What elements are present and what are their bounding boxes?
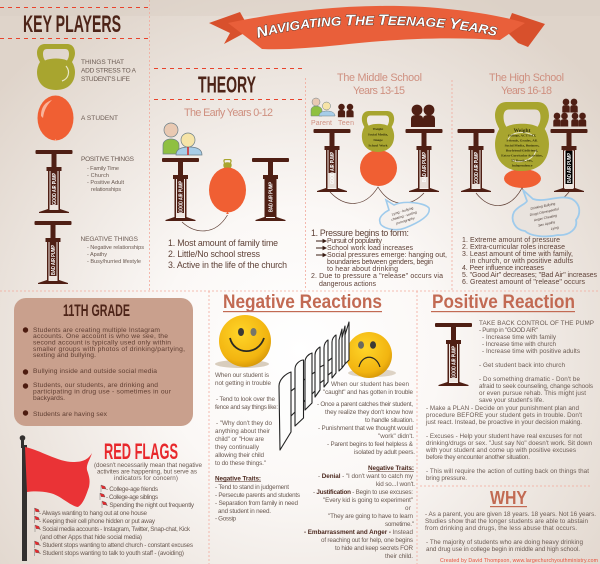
heading: key players: KEY PLAYERS: [23, 11, 121, 38]
icon: big kettlebell: Weight: [514, 128, 531, 134]
icon: bad pump: [406, 129, 442, 192]
banner title: NAVIGATING THE TEENAGE YEARS: [257, 14, 498, 38]
icon: flag: [20, 435, 92, 561]
text: stress: THINGS THAT: [81, 59, 124, 66]
credit: Created by David Thompson, www.largechurchyouthministry.com: [440, 558, 598, 564]
text: plan and excuses: [425, 405, 592, 482]
list: high school: 2. Extra-curricular roles increase: [462, 244, 565, 251]
callout: release bubble: [380, 200, 429, 230]
text: plan and excuses: - This will require the action of cutting back on things that: [426, 468, 589, 475]
labels: parent and teen: Teen: [338, 120, 354, 127]
icon: big kettlebell: Social Media, Business,: [505, 144, 540, 148]
list: red flags: - Social media accounts - Instagram, Twitter, Snap-chat, Kick: [39, 526, 191, 533]
icon: teen: [338, 104, 354, 117]
icon: bad air pump: BAD AIR PUMP: [51, 245, 57, 275]
text: plan and excuses: bring pressure.: [426, 475, 467, 482]
callout: release bubble: Drugs Disrespectful: [529, 207, 559, 217]
text: negative traits right: sometime.": [385, 521, 414, 528]
icon: good air pump: GOOD AIR PUMP: [52, 173, 58, 205]
text: when caught: "work" didn't.: [378, 433, 414, 440]
text: take back control: or even pursue rehab. This might just: [479, 390, 586, 397]
text: positive things: - Church: [87, 173, 109, 179]
text: when caught: - Parent begins to feel helpless &: [327, 441, 414, 448]
text: when caught: "caught" and has gotten in trouble: [323, 389, 413, 396]
text: negative things: - Apathy: [87, 252, 107, 258]
text: when caught: - Punishment that we thought would: [318, 425, 413, 432]
heading: middle school: The Middle School: [337, 72, 422, 84]
list: high school: 6. Greatest amount of "release" occurs: [462, 279, 586, 286]
list: middle school: Social pressures emerge: hanging out,: [327, 252, 447, 259]
icon: fence: [279, 322, 349, 450]
panel: red flags: [20, 435, 202, 561]
text: positive things: relationships: [91, 187, 121, 193]
callout: release bubble: Lying: [550, 225, 559, 231]
text: when caught: they realize they don't know how: [325, 409, 413, 416]
text: 11th grade observations: participating in drug use - sometimes in our: [33, 388, 172, 396]
icon: balloon: [360, 150, 397, 186]
icon: big kettlebell: Extra-Curricular Activities,: [501, 154, 543, 158]
text: when not in trouble: child" or "How are: [215, 436, 264, 443]
text: why: from drinking and drugs, the less abuse that occurs.: [425, 525, 577, 532]
text: plan and excuses: before they encounter another situation.: [426, 454, 530, 461]
text: negative traits right: Negative Traits:: [368, 465, 414, 472]
list: middle school: to hear about drinking: [327, 266, 398, 273]
list: middle school: Pursuit of popularity: [327, 238, 382, 245]
heading: middle school: [337, 72, 422, 97]
text: negative traits left: [215, 476, 300, 522]
text: take back control: save your student's life.: [479, 397, 544, 404]
text: negative traits right: "They are going to have to learn: [328, 513, 413, 520]
heading: high school: The High School: [489, 72, 564, 84]
text: take back control: [479, 320, 594, 404]
list: early years: 3. Active in the life of the church: [168, 260, 287, 270]
icon: good air pump: GOOD AIR PUMP: [451, 346, 457, 378]
text: when caught: When our student has been: [331, 381, 409, 388]
icon: good pump: [458, 129, 494, 192]
text: a student: A STUDENT: [81, 115, 118, 122]
text: plan and excuses: with your student and come up with positive excuses: [425, 447, 576, 454]
text: negative traits left: - Persecute parents and students: [215, 492, 300, 499]
list: high school: [462, 237, 598, 286]
text: positive things: - Family Time: [87, 166, 119, 172]
heading: why: WHY: [490, 488, 527, 508]
bullets: [23, 327, 28, 416]
callout: release bubble: Sex Apathy: [538, 220, 556, 228]
list: middle school: School work load increases: [327, 245, 414, 252]
heading: 11th grade: 11TH GRADE: [63, 301, 130, 320]
text: negative traits right: their child.: [385, 553, 413, 560]
icon: big kettlebell: Friends, Grades, AP,: [507, 138, 538, 142]
text: negative traits right: - Embarrassment and Anger - Instead: [304, 529, 413, 536]
text: 11th grade observations: backyards.: [33, 395, 65, 402]
text: take back control: - Get student back into church: [479, 362, 565, 369]
icon: happy face: [215, 315, 271, 368]
panel: negative reactions: [215, 292, 415, 560]
text: negative traits left: - Separation from family in need: [215, 500, 298, 507]
list: red flags: - Keeping their cell phone hidden or put away: [39, 518, 156, 525]
text: red flags note: (doesn't necessarily mean that negative: [94, 462, 202, 469]
text: negative traits right: "Every kid is going to experiment": [323, 497, 413, 504]
icons: small flags: [34, 485, 107, 556]
text: red flags note: indicators for concern): [114, 475, 178, 482]
heading: high school: [489, 72, 564, 97]
icon: bad pump: [550, 129, 588, 192]
text: negative traits right: - Justification - Begin to use excuses:: [313, 489, 413, 496]
callout: release bubble: Lying - bullying: [391, 206, 414, 216]
list: red flags: - Student stops wanting to attend church - constant excuses: [39, 542, 193, 549]
text: 11th grade observations: accounts. One account is who we see, the: [33, 333, 168, 340]
hose: [182, 215, 228, 231]
list: red flags: - College-age friends: [106, 486, 158, 493]
callout: release bubble: Drinking Bullying: [530, 202, 556, 211]
icon: balloon with small weight: [209, 159, 246, 214]
icon: kettlebell with pressures: Image: [373, 138, 383, 142]
icon: good pump: GOOD AIR PUMP: [178, 181, 184, 213]
heading: positive reaction: Positive Reaction: [432, 292, 575, 313]
icon: kettlebell with pressures: Weight: [373, 127, 384, 131]
icon: teen crowd: [553, 99, 586, 127]
icon: big kettlebell: College, ACT/SAT,: [508, 134, 536, 138]
icon: bad pump: [252, 158, 289, 221]
text: why: [425, 511, 596, 553]
arrows: [316, 240, 326, 256]
text: 11th grade observations: Students, our students, are drinking and: [33, 382, 158, 389]
text: 11th grade observations: Bullying inside and outside social media: [33, 368, 157, 375]
icon: good pump: GOOD AIR PUMP: [474, 152, 480, 184]
list: early years: 2. Little/No school stress: [168, 249, 261, 259]
text: positive things: [81, 156, 135, 193]
text: plan and excuses: just react. Instead, be proactive in your decision making.: [425, 419, 582, 426]
icon: bad air pump: [34, 221, 72, 284]
icon: good air pump: [435, 323, 472, 386]
text: when not in trouble: When our student is: [215, 372, 269, 379]
text: when not in trouble: - Tend to look over the: [216, 396, 275, 403]
text: negative things: - Negative relationships: [87, 245, 144, 251]
icon: bad pump: BAD AIR PUMP: [268, 182, 274, 212]
text: negative traits right: [304, 465, 415, 560]
list: red flags: - Spending the night out frequently: [106, 502, 195, 509]
list: early years: 1. Most amount of family time: [168, 238, 278, 248]
text: stress: [81, 59, 137, 83]
list: red flags: - Student stops wanting to talk to youth staff - (avoiding): [39, 550, 184, 557]
list: middle school: dangerous actions: [319, 281, 376, 288]
labels: parent and teen: [311, 120, 354, 127]
text: when caught: to handle situation.: [365, 417, 414, 424]
text: plan and excuses: procedure BEFORE your student gets in trouble. Don't: [426, 412, 582, 419]
heading: theory: THEORY: [198, 72, 256, 98]
text: stress: STUDENT'S LIFE: [81, 76, 131, 83]
text: stress: ADD STRESS TO A: [81, 68, 137, 74]
text: negative traits right: kid so...I won't.: [376, 481, 415, 488]
text: negative traits left: and student in need.: [218, 508, 271, 515]
text: negative traits right: to hide and keep secrets FOR: [335, 545, 413, 552]
text: why: Studies show that the longer students are able to abstain: [425, 518, 588, 525]
icon: bad pump: BAD AIR PUMP: [422, 152, 428, 182]
panel: theory: [162, 72, 289, 270]
text: when not in trouble: allowing their child: [215, 452, 264, 459]
list: high school: 3. Least amount of time with family,: [462, 251, 573, 258]
text: negative things: NEGATIVE THINGS: [80, 236, 139, 243]
text: positive things: POSITIVE THINGS: [81, 156, 135, 163]
heading: middle school: Years 13-15: [353, 85, 405, 97]
text: negative traits right: of reaching out for help, one begins: [321, 537, 413, 544]
panel: middle school: [311, 72, 447, 288]
list: red flags: - College-age siblings: [106, 494, 158, 501]
panel: positive reaction: [425, 292, 598, 564]
text: positive things: - Positive Adult: [87, 180, 124, 186]
panel: high school: [458, 72, 598, 286]
callout: release bubble: cheating - sexting: [391, 210, 417, 222]
callout: release bubble: pornography: [395, 216, 415, 226]
list: middle school: [311, 228, 447, 288]
text: why: - The majority of students who are doing heavy drinking: [426, 539, 583, 546]
text: negative things: [80, 236, 144, 265]
text: when not in trouble: they continually: [215, 444, 260, 451]
hoses: [476, 188, 569, 206]
list: high school: in church, or with positive adults: [470, 258, 574, 265]
icon: kettlebell with pressures: Social Media,: [368, 132, 388, 136]
text: when not in trouble: [215, 372, 278, 467]
icon: balloon: [38, 96, 74, 141]
icon: parents: [163, 123, 202, 155]
text: negative traits right: or: [405, 505, 411, 512]
heading: red flags: RED FLAGS: [104, 439, 178, 464]
text: when not in trouble: not getting in trouble: [215, 380, 271, 387]
list: early years: [168, 238, 287, 270]
list: high school: 1. Extreme amount of pressure: [462, 237, 560, 244]
callout: release bubble: [513, 190, 579, 236]
panel: 11th grade: [14, 298, 193, 426]
icon: good air pump: [36, 150, 72, 213]
list: middle school: boundaries between genders, begin: [327, 259, 433, 266]
text: 11th grade observations: second account is typically used only within: [33, 340, 171, 346]
text: red flags note: activites are happening, but serve as: [97, 468, 197, 476]
icon: parent: [311, 98, 335, 116]
text: take back control: - Increase time with church: [482, 341, 556, 348]
icon: big kettlebell: 55 Roads, Sex,: [511, 158, 533, 162]
text: negative traits left: Negative Traits:: [215, 476, 261, 482]
text: take back control: TAKE BACK CONTROL OF THE PUMP: [479, 320, 594, 327]
text: plan and excuses: drinking/drugs or sex. "Just say No" doesn't work. Sit down: [426, 440, 592, 447]
text: 11th grade observations: Students are having sex: [33, 411, 108, 418]
list: red flags: - Always wanting to hang out at one house: [39, 510, 147, 517]
icon: teens: [411, 105, 435, 127]
list: red flags: (and other Apps that hide social media): [40, 534, 142, 541]
text: take back control: - Increase time with family: [482, 334, 557, 341]
icon: kettlebell: [37, 44, 75, 90]
icon: good pump: [314, 129, 350, 192]
text: negative traits left: - Tend to stand in judgement: [215, 484, 289, 491]
labels: parent and teen: Parent: [311, 120, 332, 127]
text: when not in trouble: anything about their: [215, 428, 270, 435]
text: when not in trouble: - "Why don't they do: [216, 420, 272, 427]
title banner: [209, 6, 545, 50]
icon: big kettlebell: [495, 102, 549, 171]
text: when caught: isolated by adult peers.: [354, 449, 415, 456]
heading: negative reactions: Negative Reactions: [223, 292, 382, 313]
callout: release bubble: Anger Cheating: [532, 214, 557, 223]
subheading: early years: The Early Years 0-12: [184, 107, 273, 119]
panel: key players: [23, 11, 144, 284]
list: red flags: [39, 486, 195, 557]
list: middle school: 2. Due to pressure a "release" occurs via: [311, 273, 443, 280]
icon: good pump: GOOD AIR PUMP: [330, 152, 336, 184]
text: 11th grade observations: sexting and bullying.: [33, 352, 96, 359]
text: 11th grade observations: Students are creating multiple Instagram: [33, 327, 160, 334]
text: plan and excuses: - Excuses - Help your student have real excuses for not: [426, 433, 582, 440]
text: take back control: - Increase time with positive adults: [482, 348, 580, 355]
text: 11th grade observations: smaller groups with photos of drinking/partying,: [33, 346, 185, 353]
icon: squished balloon: [504, 169, 541, 188]
text: take back control: afraid to seek counseling, change schools: [479, 383, 593, 390]
icon: big kettlebell: Boyfriend/Girlfriend,: [506, 148, 538, 152]
icon: bad pump: BAD AIR PUMP: [567, 153, 573, 183]
text: negative things: - Busy/hurried lifestyle: [87, 259, 141, 265]
hoses: [330, 187, 424, 203]
text: negative traits right: - Denial - "I don't want to catch my: [318, 473, 414, 480]
list: high school: 5. "Good Air" decreases; "Bad Air" increases: [462, 272, 598, 279]
list: middle school: 1. Pressure begins to form:: [311, 228, 409, 238]
list: high school: 4. Peer influence increases: [462, 265, 544, 272]
text: why: and drug use in college begin in middle and high school.: [426, 546, 580, 553]
icon: kettlebell with pressures: [362, 111, 394, 152]
icon: big kettlebell: Independence: [512, 164, 533, 168]
text: negative traits left: - Gossip: [215, 516, 236, 522]
text: plan and excuses: - Make a PLAN - Decide on your punishment plan and: [426, 405, 579, 412]
text: when caught: - Once a parent catches their student,: [317, 401, 413, 408]
icon: sad face: [346, 332, 396, 378]
text: red flags note: [94, 462, 202, 482]
text: 11th grade observations: [33, 327, 185, 418]
icon: kettlebell with pressures: School Work: [368, 144, 388, 148]
heading: high school: Years 16-18: [501, 85, 552, 97]
text: when not in trouble: fence and say things like:: [215, 404, 278, 411]
icon: good pump: [162, 158, 199, 221]
text: when caught: [317, 381, 415, 456]
text: take back control: - Do something dramatic - Don't be: [479, 376, 580, 383]
text: take back control: - Pump in "GOOD AIR": [479, 327, 538, 334]
text: when not in trouble: to do these things.": [215, 460, 266, 467]
text: why: - As a parent, you are given 18 years. 18 years. Not 16 years.: [425, 511, 596, 518]
